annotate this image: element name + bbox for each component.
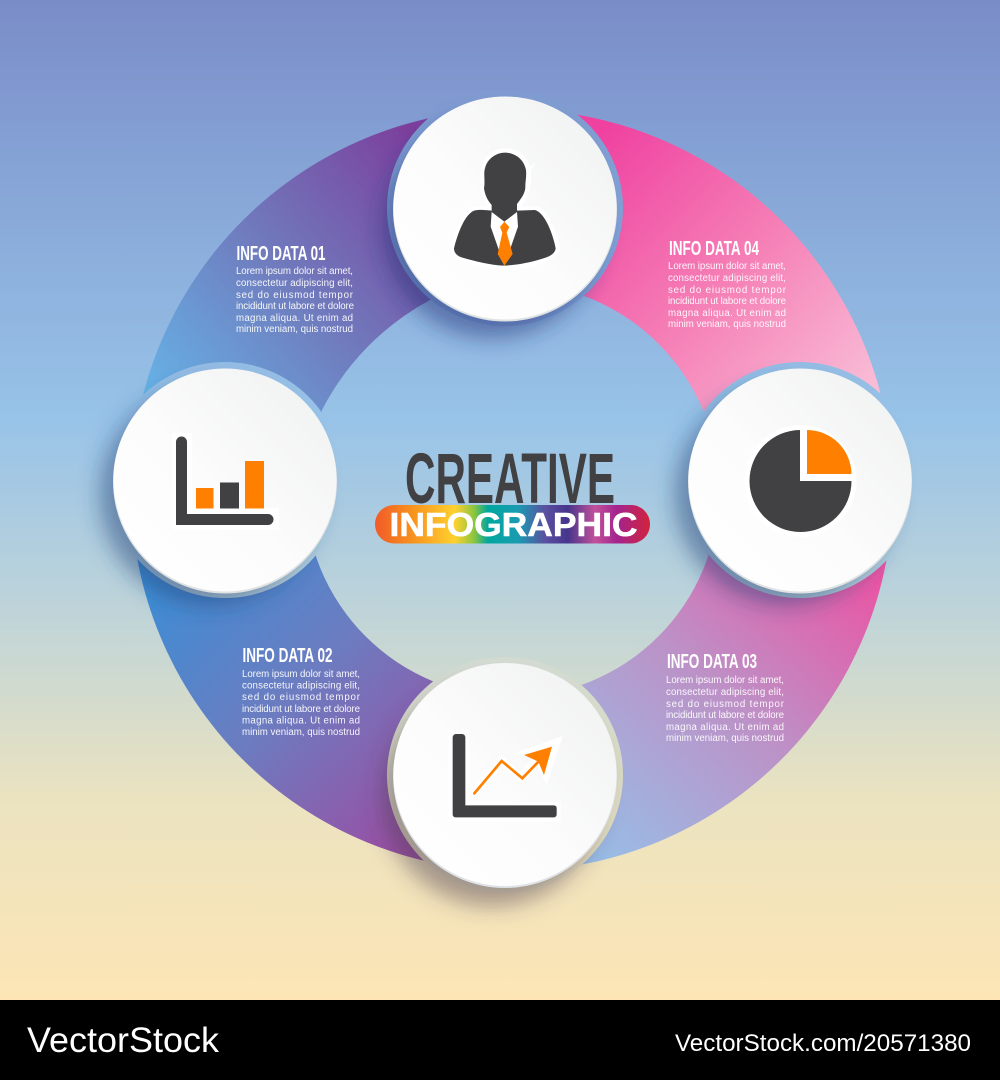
ring segment: info data 01 — [131, 109, 512, 490]
text block: info data 03 — [666, 650, 785, 744]
text block: info data 03: incididunt ut labore et dolore — [666, 710, 784, 721]
text block: info data 04: INFO DATA 04 — [669, 237, 759, 260]
footer logo text: VectorStock — [27, 1021, 220, 1060]
footer image id: VectorStock.com/20571380 — [675, 1030, 971, 1057]
text block: info data 02: consectetur adipiscing elit, — [242, 680, 360, 692]
circle: top person — [382, 90, 623, 338]
circle: left bar chart — [100, 362, 343, 605]
ring segment: info data 02 — [131, 490, 512, 871]
text block: info data 02: minim veniam, quis nostrud — [242, 727, 360, 738]
text block: info data 04: magna aliqua. Ut enim ad — [668, 308, 786, 319]
icon: businessman — [450, 148, 560, 270]
text block: info data 04: sed do eiusmod tempor — [668, 285, 787, 296]
icon: bar chart — [172, 433, 279, 530]
text block: info data 04: minim veniam, quis nostrud — [668, 319, 786, 330]
text block: info data 01: sed do eiusmod tempor — [236, 290, 354, 301]
text block: info data 01: incididunt ut labore et dolore — [236, 301, 354, 312]
text block: info data 03: Lorem ipsum dolor sit amet, — [666, 675, 784, 686]
text block: info data 03: minim veniam, quis nostrud — [666, 733, 784, 744]
text block: info data 02: magna aliqua. Ut enim ad — [242, 716, 360, 726]
text block: info data 02: Lorem ipsum dolor sit amet, — [242, 669, 360, 680]
text block: info data 04: Lorem ipsum dolor sit amet, — [668, 261, 786, 272]
text block: info data 01: Lorem ipsum dolor sit amet, — [236, 266, 353, 277]
text block: info data 02: sed do eiusmod tempor — [242, 692, 361, 703]
icon: pie chart — [744, 425, 856, 537]
ring segment: info data 03 — [512, 490, 893, 871]
footer bar — [0, 1000, 1000, 1080]
icon: line chart with arrow — [449, 730, 563, 822]
ring segment: info data 04 — [512, 109, 893, 490]
text block: info data 01: consectetur adipiscing elit, — [236, 278, 353, 289]
text block: info data 04 — [668, 237, 787, 330]
text block: info data 02 — [242, 644, 361, 738]
circle: bottom line chart — [382, 657, 623, 906]
text block: info data 04: incididunt ut labore et dolore — [668, 296, 786, 307]
text block: info data 02: INFO DATA 02 — [242, 644, 332, 667]
text block: info data 01 — [236, 242, 354, 335]
text block: info data 03: magna aliqua. Ut enim ad — [666, 722, 784, 733]
text block: info data 01: INFO DATA 01 — [236, 242, 326, 265]
text block: info data 03: consectetur adipiscing elit, — [666, 687, 784, 698]
circle: right pie chart — [675, 362, 918, 605]
text block: info data 03: sed do eiusmod tempor — [666, 699, 785, 710]
title badge: infographic: INFOGRAPHIC — [390, 506, 638, 543]
text block: info data 01: minim veniam, quis nostrud — [236, 324, 353, 335]
text block: info data 01: magna aliqua. Ut enim ad — [236, 313, 353, 324]
text block: info data 03: INFO DATA 03 — [667, 650, 757, 673]
title: creative: CREATIVE — [405, 440, 615, 519]
text block: info data 02: incididunt ut labore et dolore — [242, 704, 360, 715]
text block: info data 04: consectetur adipiscing elit, — [668, 273, 786, 284]
